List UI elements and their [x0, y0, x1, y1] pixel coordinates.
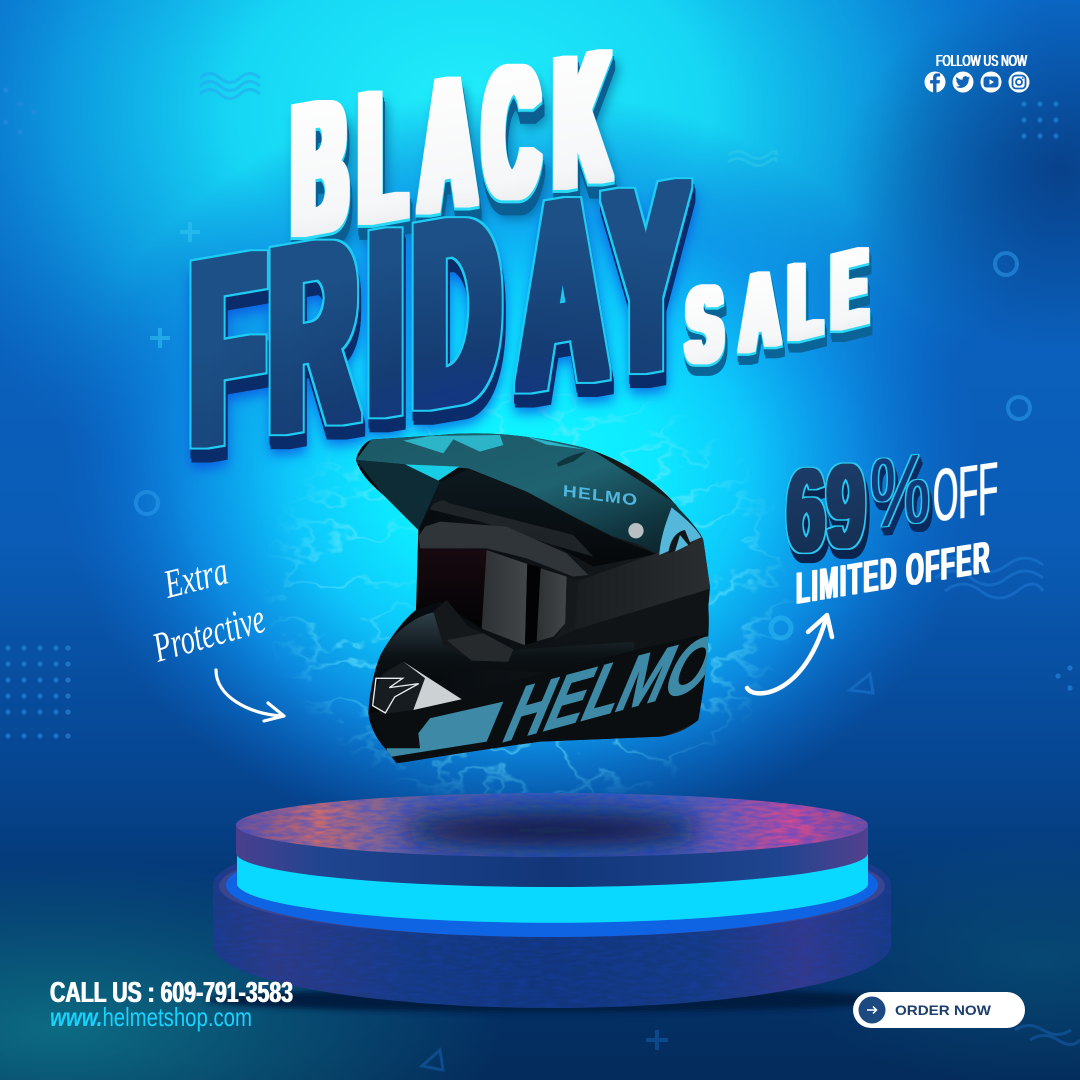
extra protective label [147, 548, 270, 672]
extra protective label: Extra [159, 548, 232, 607]
helmet shadow on podium [402, 814, 702, 846]
goggle strap [574, 537, 712, 630]
extra protective label: Protective [147, 596, 270, 672]
goggle lens left, dark [416, 548, 487, 629]
visor and matte crown [356, 430, 705, 555]
icon: instagram [1008, 72, 1030, 92]
upper disc side [236, 793, 868, 887]
visor underside [356, 460, 440, 530]
icon: arrow circle [858, 996, 886, 1024]
teal graphic band [387, 702, 503, 757]
helmet rivets [628, 523, 644, 538]
chin guard top [368, 612, 635, 713]
icon: twitter [952, 72, 974, 92]
chin vent [370, 662, 425, 714]
helmet logo: HELMO: HELMO [562, 482, 639, 510]
percent sign: % [870, 432, 930, 549]
glowing cyan band [237, 853, 868, 923]
website: www.helmetshop.com [50, 1002, 252, 1032]
arrow: to helmet [216, 670, 284, 721]
floor shadow [207, 988, 897, 1012]
follow us label: FOLLOW US NOW [936, 53, 1028, 70]
arrow: to limited offer [747, 615, 832, 693]
title: SALE: SALE [688, 225, 866, 388]
nose piece [433, 600, 513, 663]
lower disc [213, 820, 891, 1020]
visor graphic [403, 435, 585, 453]
icon: facebook [924, 72, 946, 93]
vent opening [405, 464, 459, 481]
helmet shell [356, 433, 710, 763]
podium [207, 790, 897, 1020]
button label: ORDER NOW [895, 1002, 992, 1018]
phone: CALL US : 609-791-3583 [50, 977, 293, 1009]
lower side panel [553, 588, 712, 653]
title: BLACK: BLACK [293, 12, 608, 274]
lower skirt [368, 633, 708, 765]
brow black gloss [418, 469, 657, 567]
helmet [356, 430, 733, 765]
upper disc top [236, 790, 868, 860]
social: follow us [924, 53, 1030, 93]
discount: 69% OFF [787, 432, 998, 579]
icon: youtube [980, 72, 1002, 92]
text: OFF [933, 446, 998, 538]
goggle lens panels [482, 550, 527, 645]
title: FRIDAY: FRIDAY [191, 126, 686, 500]
HELMO wordmark on shell: HELMO [492, 615, 733, 760]
contact: phone and website [50, 977, 293, 1032]
side logo [659, 507, 701, 555]
carbon goggle band [418, 522, 588, 577]
button: order now [853, 992, 1025, 1028]
69: 69 [787, 439, 867, 579]
